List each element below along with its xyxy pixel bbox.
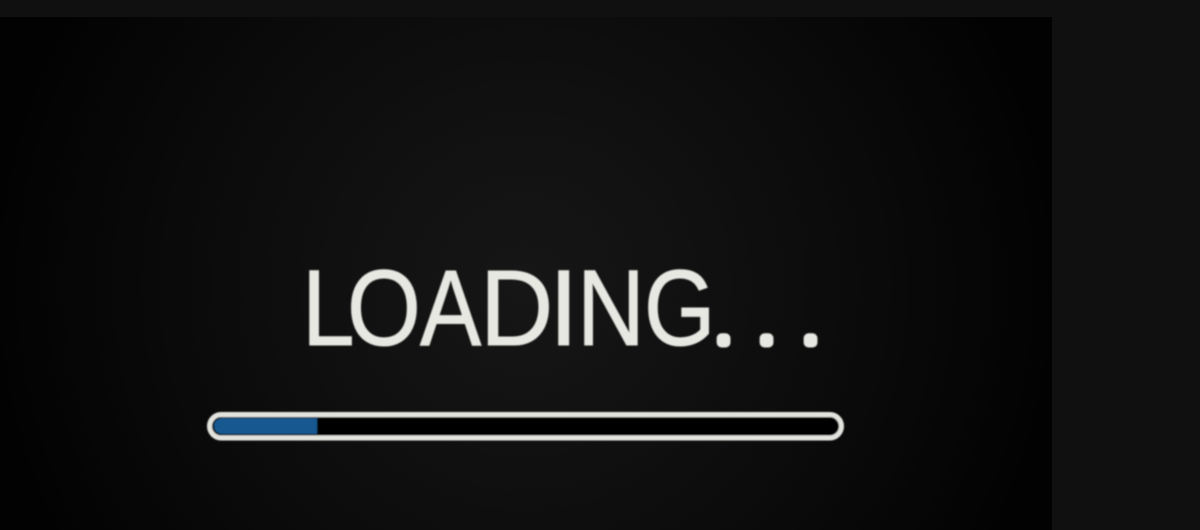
loading heading: . xyxy=(805,308,816,352)
loading heading: . xyxy=(761,308,772,352)
loading heading: O xyxy=(347,247,421,368)
loading heading: . xyxy=(718,308,729,352)
loading heading: D xyxy=(480,248,553,369)
loading heading xyxy=(302,247,816,369)
progress bar xyxy=(210,414,842,438)
loading heading: A xyxy=(420,248,481,369)
progress bar fill xyxy=(214,418,317,434)
loading heading: I xyxy=(549,247,578,368)
loading heading: N xyxy=(577,248,645,368)
loading heading: G xyxy=(644,248,715,369)
progress bar track xyxy=(210,414,842,438)
loading heading: L xyxy=(302,247,355,368)
